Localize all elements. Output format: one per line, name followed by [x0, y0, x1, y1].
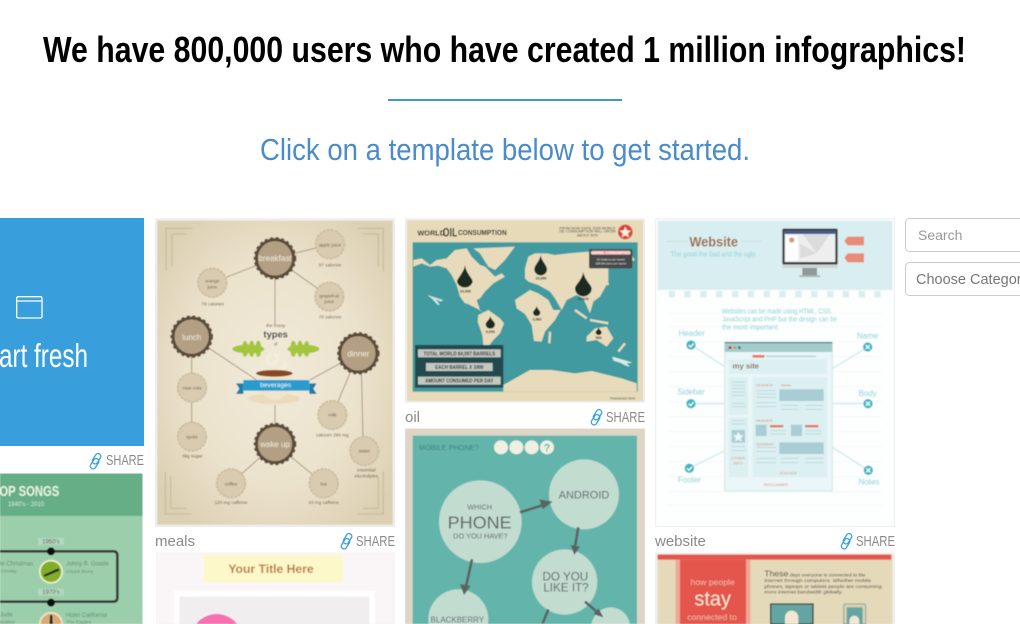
website caption: website: [654, 533, 706, 550]
panel: world oil consumption template: OIL CONSUMPTION WILL GROW: [559, 230, 616, 234]
panel: meals template: [155, 218, 395, 527]
start fresh label: art fresh: [0, 337, 88, 374]
panel: meals template: of: [274, 342, 278, 347]
share link: oil: [590, 409, 645, 426]
panel: start fresh: [0, 218, 144, 446]
panel: website template: Name: [857, 332, 879, 341]
panel: meals template: the many: [266, 323, 286, 328]
panel: meals template: grapefruit: [319, 293, 340, 298]
panel: mobile phone template: WHICH: [467, 502, 492, 511]
panel: how people stay connected template: internet through computers. Whether mobile: [764, 578, 871, 584]
panel: top songs template: Jude: [0, 613, 13, 619]
barrel consumption box: [589, 249, 632, 268]
panel: website template: Websites can be made using HTML, CSS,: [722, 308, 832, 315]
panel: meals template: dinner: [347, 350, 370, 359]
panel: world oil consumption template: [405, 218, 645, 403]
search input: [906, 218, 1020, 252]
panel: top songs template: Hotel California: [66, 613, 108, 619]
panel: mobile phone template: ANDROID: [559, 490, 609, 502]
panel: world oil consumption template: 6,653: [486, 330, 495, 334]
panel: world oil consumption template: 158.98 Liters per barrel: [595, 261, 626, 265]
arrows: [466, 505, 597, 623]
panel: world oil consumption template: 42 Gallons per barrel: [597, 258, 625, 262]
panel: meals template: breakfast: [259, 254, 292, 263]
panel: top songs template: Chuck Berry: [66, 569, 94, 575]
panel: mobile phone template: DO YOU HAVE?: [453, 531, 507, 540]
panel: how people stay connected template: stay: [694, 589, 731, 611]
panel: your title template: [155, 552, 395, 624]
panel: meals template: tea: [320, 481, 327, 486]
leaves: [232, 341, 319, 357]
panel: your title template: Your Title Here: [228, 562, 314, 576]
panel: top songs template: 1940's - 2010: [8, 502, 45, 508]
panel: website template: OTHER: [731, 455, 745, 460]
panel: meals template: 120 mg caffeine: [214, 500, 248, 505]
coffee cup: [267, 353, 286, 370]
panel: website template: [655, 218, 895, 527]
panel: how people stay connected template: more internet bandwidth globally.: [764, 590, 843, 596]
panel: website template: INFO: [733, 460, 743, 465]
panel: website template: the most important.: [722, 325, 779, 332]
panel: website template: my site: [733, 362, 759, 371]
monitor: [782, 229, 838, 265]
share link: meals: [340, 533, 395, 550]
panel: meals template: milk: [328, 413, 337, 418]
panel: mobile phone template: MOBILE PHONE?: [419, 443, 479, 452]
tabs: [669, 291, 881, 297]
panel: meals template: essential: [357, 468, 376, 473]
panel: top songs template: [0, 472, 145, 624]
panel: mobile phone template: [405, 428, 645, 624]
panel: meals template: wake up: [259, 440, 290, 449]
panel: meals template: 87 calories: [319, 263, 342, 268]
beverages ribbon: [236, 383, 243, 394]
panel: meals template: 39g sugar: [182, 453, 203, 458]
panel: website template: Website: [689, 233, 738, 249]
panel: meals template: 78 calories: [201, 302, 225, 307]
panel: world oil consumption template: 25,142: [578, 297, 589, 301]
share link: start fresh: [89, 452, 144, 470]
panel: website template: News: [781, 383, 791, 388]
panel: world oil consumption template: OIL: [443, 225, 457, 239]
panel: mobile phone template: LIKE IT?: [543, 582, 589, 595]
ruled lines: [668, 313, 882, 505]
panel: meals template: rose cola: [183, 386, 202, 391]
icon: browser window: [17, 297, 42, 318]
panel: world oil consumption template: AMOUNT CONSUMED PER DAY: [425, 379, 494, 385]
panel: website template: FOOTER: [780, 471, 797, 476]
panel: meals template: types: [263, 329, 288, 339]
panel: website template: JavaScript and PHP but the design can be: [722, 317, 837, 324]
panel: how people stay connected template: These days everyone is connected to the: [764, 568, 866, 578]
subtitle: Click on a template below to get started.: [260, 132, 750, 167]
panel: world oil consumption template: 3,582: [532, 317, 542, 321]
panel: world oil consumption template: 15,000: [535, 276, 547, 280]
panel: how people stay connected template: phones, laptops or tablets people are consuming: [764, 584, 882, 590]
panel: how people stay connected template: connected to: [687, 612, 737, 622]
panel: website template: SIDEBAR: [756, 442, 774, 447]
panel: website template: HEADER: [756, 383, 773, 388]
panel: top songs template: te Christmas: [0, 562, 33, 568]
panel: website template: The good the bad and the ugly.: [671, 251, 757, 258]
panel: website template: Footer: [678, 476, 701, 485]
panel: meals template: beverages: [260, 382, 292, 389]
panel: world oil consumption template: FROM NOW UNTIL 2025 WORLD: [559, 226, 616, 230]
panel: meals template: 70 calories: [319, 315, 342, 320]
panel: world oil consumption template: *resources here: [609, 396, 635, 400]
share link: website: [840, 533, 895, 550]
panel: world oil consumption template: 983: [596, 336, 602, 340]
panel: world oil consumption template: EACH BARREL X 1000: [435, 365, 483, 371]
panel: meals template: electrolytes: [355, 473, 379, 478]
meal nodes: [173, 240, 377, 463]
stats banner: [415, 345, 503, 388]
category select: [906, 262, 1020, 296]
panel: meals template: juice: [324, 299, 335, 304]
panel: top songs template: Crosby: [1, 569, 17, 575]
panel: how people stay connected template: [655, 552, 895, 624]
panel: top songs template: 1970's: [42, 590, 60, 596]
panel: how people stay connected template: how people: [691, 577, 735, 587]
panel: website template: DISCLAIMER: [764, 482, 788, 487]
share link: website: SHARE: [856, 533, 895, 550]
panel: top songs template: Johny B. Goode: [66, 562, 110, 568]
panel: world oil consumption template: BARREL CONSUMPTION: [591, 251, 631, 255]
panel: world oil consumption template: TOTAL WORLD 84,097 BARRELS: [423, 351, 495, 357]
panel: world oil consumption template: ABOUT 50%: [577, 233, 599, 237]
meals caption: meals: [155, 533, 195, 550]
panel: meals template: apple juice: [319, 242, 342, 247]
share link: start fresh: SHARE: [106, 452, 144, 469]
panel: meals template: sprite: [186, 434, 198, 439]
airplanes: [427, 295, 443, 305]
panel: website template: HEADER: [756, 418, 773, 423]
panel: world oil consumption template: CONSUMPTION: [458, 230, 507, 237]
oil drops: [457, 255, 602, 335]
panel: meals template: juice: [207, 284, 218, 289]
panel: meals template: water: [359, 449, 370, 454]
panel: mobile phone template: ?: [544, 442, 550, 454]
world map: [413, 247, 637, 392]
panel: mobile phone template: PHONE: [448, 512, 512, 532]
share link: meals: SHARE: [356, 533, 395, 550]
panel: website template: Notes: [859, 478, 879, 487]
panel: top songs template: OP SONGS: [0, 484, 60, 500]
panel: website template: Header: [679, 329, 705, 338]
panel: website template: Body: [859, 389, 877, 398]
panel: world oil consumption template: 19,000: [460, 290, 471, 294]
panel: meals template: coffee: [225, 481, 238, 486]
panel: meals template: orange: [205, 278, 220, 283]
panel: meals template: lunch: [182, 333, 201, 342]
search input: Search: [918, 227, 962, 243]
panel: mobile phone template: DO YOU: [542, 570, 588, 583]
share link: oil: SHARE: [606, 409, 645, 426]
panel: meals template: 43 mg caffeine: [308, 500, 339, 505]
oil caption: oil: [405, 409, 420, 426]
panel: world oil consumption template: WORLD: [417, 228, 445, 237]
panel: website template: Sidebar: [677, 387, 705, 396]
panel: top songs template: 1950's: [42, 539, 60, 545]
site wireframe: [725, 342, 832, 491]
panel: meals template: calcium 296 mg: [316, 432, 349, 437]
